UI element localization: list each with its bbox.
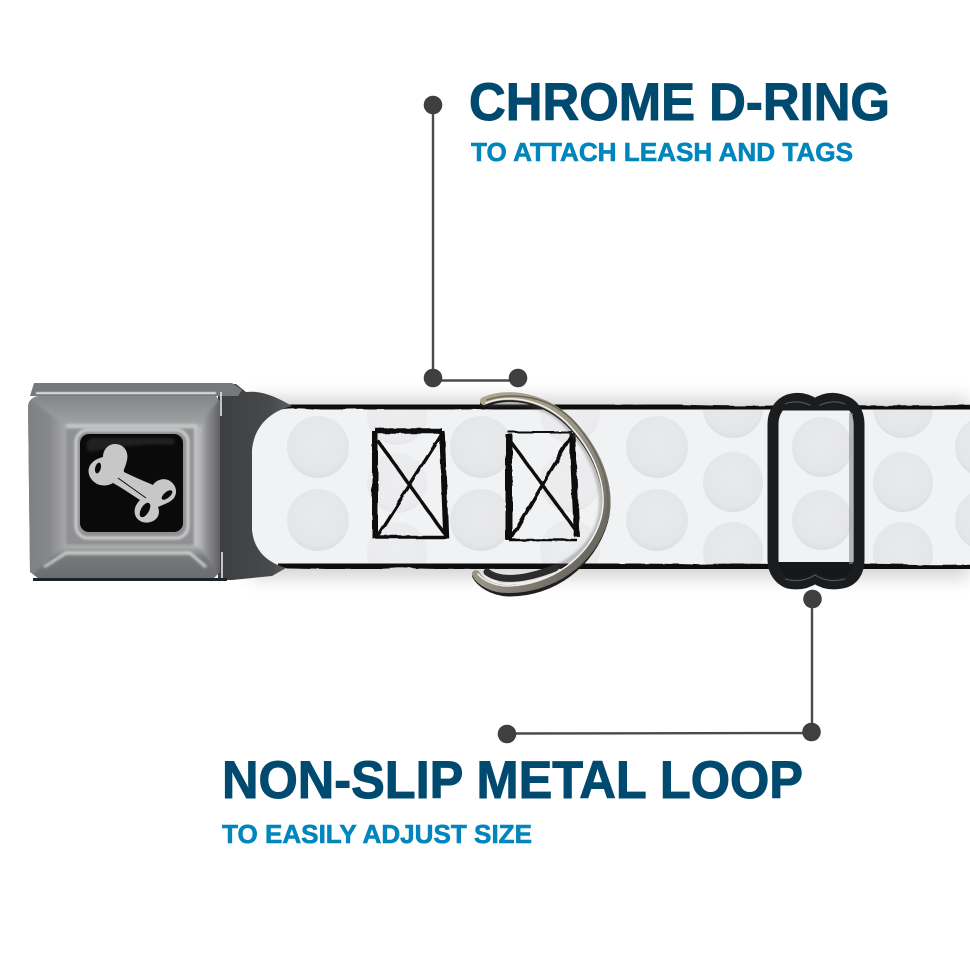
subheading: metal loop: TO EASILY ADJUST SIZE	[222, 819, 532, 849]
buckle clasp	[218, 384, 292, 580]
non-slip metal loop	[773, 398, 859, 584]
box-x stitching left	[375, 431, 446, 538]
webbing strap	[252, 404, 970, 569]
icon: bone	[89, 444, 176, 523]
subheading: d-ring: TO ATTACH LEASH AND TAGS	[471, 137, 853, 167]
callout line: d-ring	[424, 96, 527, 387]
seatbelt buckle	[26, 383, 292, 581]
box-x stitching right	[508, 432, 577, 540]
callout line: metal loop	[498, 590, 822, 743]
black inlay	[80, 434, 183, 532]
chrome d-ring	[476, 396, 608, 593]
buckle face	[26, 394, 222, 580]
collar product	[26, 378, 970, 593]
strap shadow	[250, 398, 970, 578]
heading: chrome d-ring: CHROME D-RING	[469, 73, 890, 132]
heading: non-slip metal loop: NON-SLIP METAL LOOP	[222, 751, 803, 810]
buckle rim	[30, 383, 242, 581]
